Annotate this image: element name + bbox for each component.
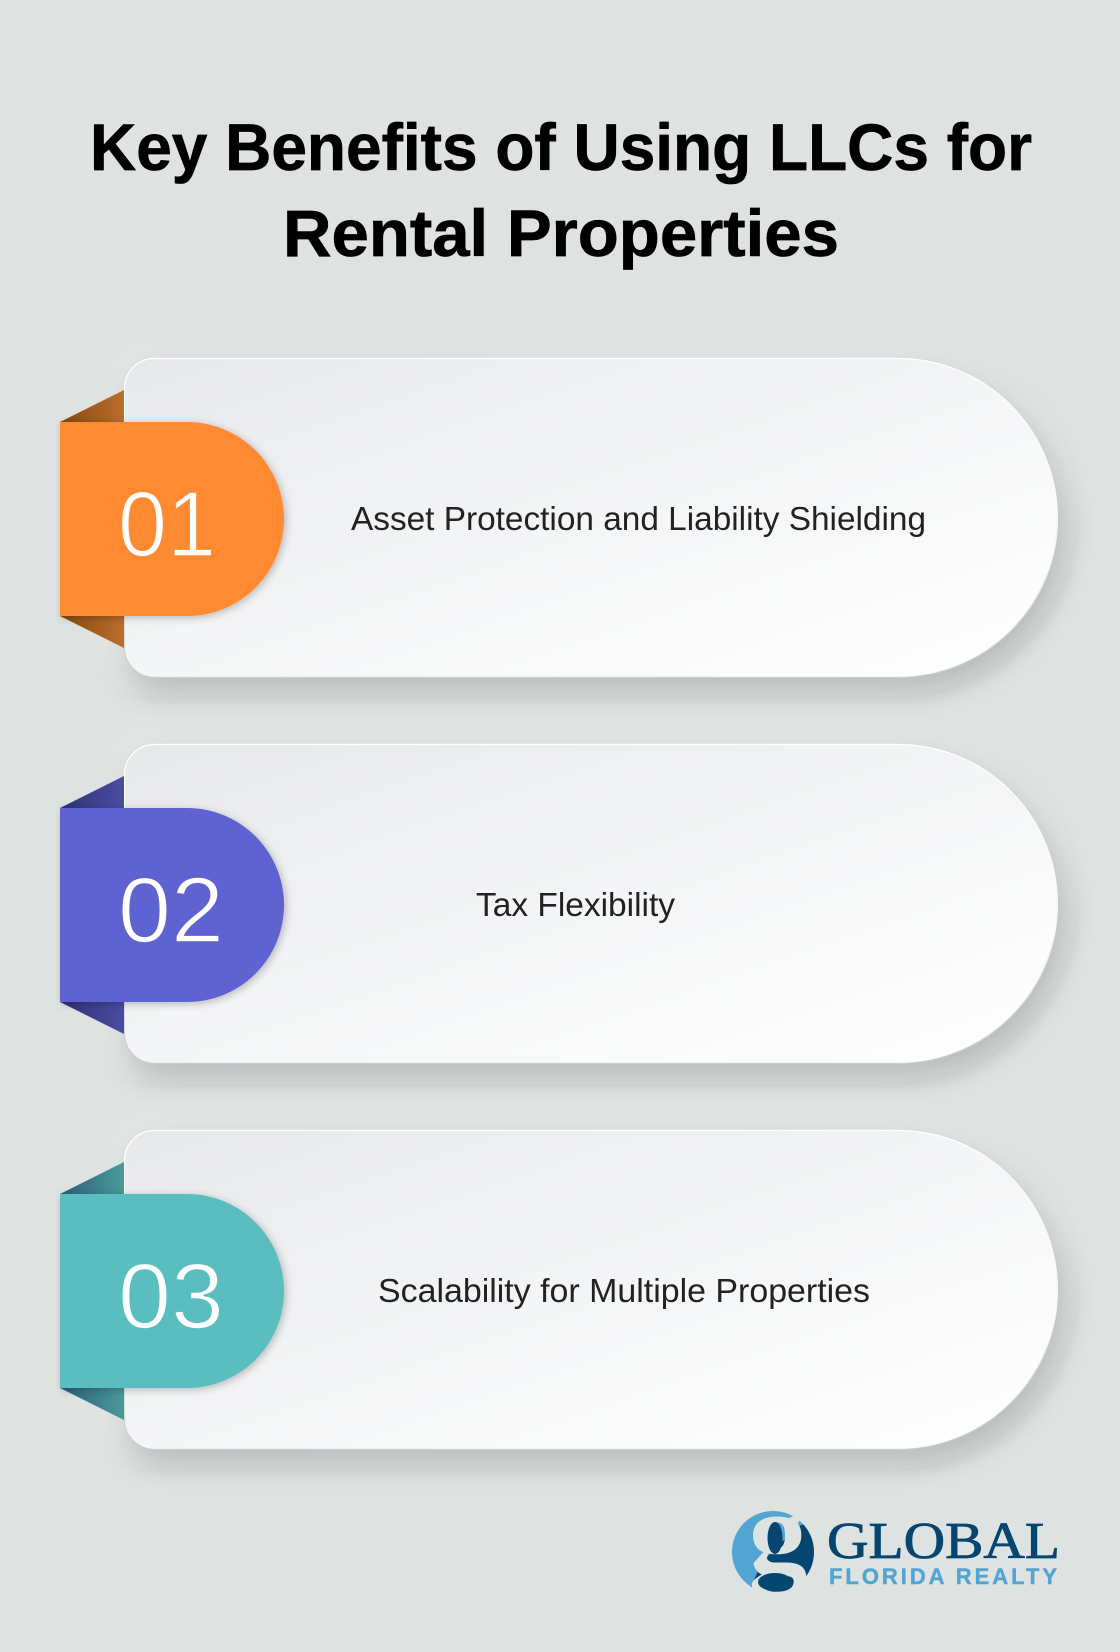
number 02: 02 [118, 858, 224, 962]
icon: g monogram: g [748, 1467, 808, 1598]
card 02 [124, 744, 1057, 1064]
number 03: 03 [118, 1244, 224, 1348]
card 01 [124, 358, 1057, 678]
number 01: 01 [118, 472, 216, 576]
title: Rental Properties [283, 196, 839, 270]
ribbon folds 01 [60, 390, 124, 648]
panel: benefit 02 [60, 744, 1057, 1064]
label 03: Scalability for Multiple Properties [378, 1272, 870, 1309]
label 02: Tax Flexibility [476, 886, 675, 923]
ribbon folds 03 [60, 1162, 124, 1420]
wordmark FLORIDA REALTY: FLORIDA REALTY [829, 1564, 1057, 1589]
ribbon folds 02 [60, 776, 124, 1034]
wordmark GLOBAL: GLOBAL [827, 1513, 1060, 1570]
number badge 01 [60, 422, 284, 616]
icon: g monogram [732, 1511, 814, 1592]
logo: Global Florida Realty [732, 1511, 1057, 1592]
number badge 03 [60, 1194, 284, 1388]
label 01: Asset Protection and Liability Shielding [351, 500, 926, 537]
card 03 [124, 1130, 1057, 1450]
number badge 02 [60, 808, 284, 1002]
panel: benefit 03 [60, 1130, 1057, 1450]
title [90, 110, 1032, 270]
title: Key Benefits of Using LLCs for [90, 110, 1032, 184]
panel: benefit 01 [60, 358, 1057, 678]
